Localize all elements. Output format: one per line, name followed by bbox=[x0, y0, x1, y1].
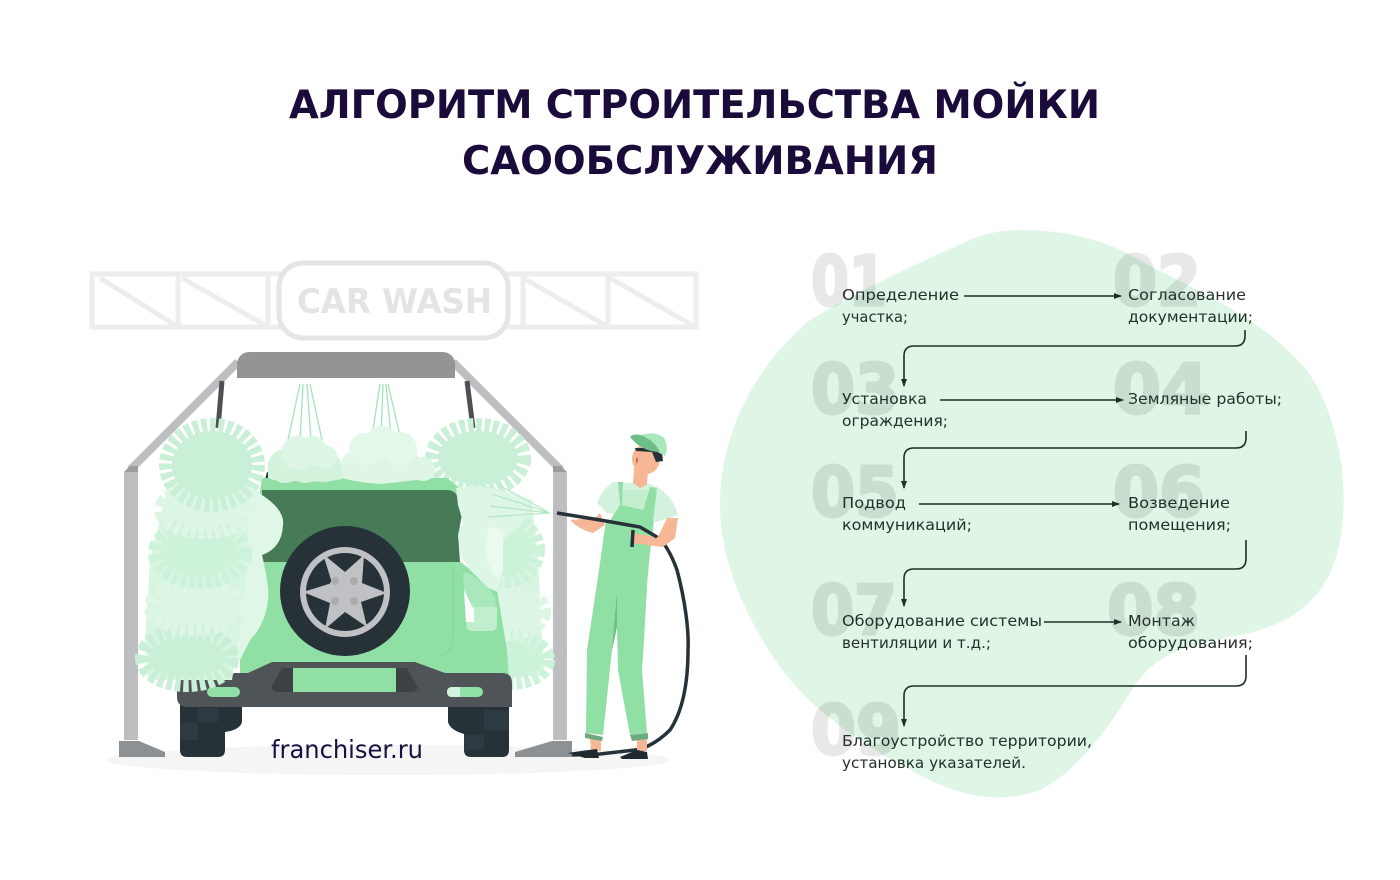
step numbers: 09 bbox=[811, 691, 901, 771]
car wash sign with truss: CAR WASH bbox=[297, 282, 492, 322]
website label: franchiser.ru bbox=[271, 735, 423, 764]
foam on the right side bbox=[456, 486, 530, 592]
car bbox=[177, 472, 512, 757]
step numbers bbox=[811, 242, 1209, 771]
right brushes bbox=[438, 431, 545, 680]
step numbers: 08 bbox=[1107, 571, 1200, 651]
side window bbox=[463, 573, 497, 631]
title: АЛГОРИТМ СТРОИТЕЛЬСТВА МОЙКИ bbox=[289, 81, 1100, 128]
panel: steps background blob bbox=[720, 230, 1344, 797]
rear wheels bbox=[180, 700, 242, 757]
shirt bbox=[597, 482, 678, 522]
step numbers: 06 bbox=[1113, 453, 1205, 533]
worker bbox=[557, 433, 688, 759]
hose bbox=[572, 537, 688, 755]
ground shadow bbox=[107, 745, 669, 775]
step labels bbox=[842, 286, 1282, 772]
step labels: ограждения; bbox=[842, 412, 948, 430]
foam on the left side bbox=[222, 487, 283, 660]
illustration: car wash bbox=[87, 241, 700, 775]
step numbers: 01 bbox=[811, 242, 887, 322]
step labels: Подвод bbox=[842, 494, 906, 512]
step labels: Земляные работы; bbox=[1128, 390, 1282, 408]
spare wheel bbox=[280, 526, 410, 656]
title bbox=[289, 81, 1100, 184]
title: САООБСЛУЖИВАНИЯ bbox=[462, 138, 938, 184]
step labels: помещения; bbox=[1128, 516, 1231, 534]
water jets bbox=[288, 384, 400, 440]
step labels: установка указателей. bbox=[842, 754, 1026, 772]
bib bbox=[599, 482, 657, 575]
car wash sign with truss bbox=[92, 263, 696, 338]
step numbers: 03 bbox=[811, 350, 899, 430]
step numbers: 05 bbox=[811, 453, 899, 533]
step labels: Установка bbox=[842, 390, 927, 408]
ankles bbox=[590, 738, 647, 751]
arms bbox=[570, 513, 678, 547]
step labels: оборудования; bbox=[1128, 634, 1253, 652]
top foam bbox=[268, 426, 435, 484]
flow arrows bbox=[904, 296, 1246, 726]
wash frame bbox=[119, 352, 572, 757]
step numbers: 02 bbox=[1113, 242, 1201, 322]
step numbers: 04 bbox=[1113, 350, 1209, 430]
step labels: Монтаж bbox=[1128, 612, 1195, 630]
step labels: Определение bbox=[842, 286, 959, 304]
licence plate bbox=[293, 668, 396, 692]
step labels: коммуникаций; bbox=[842, 516, 972, 534]
spray from gun bbox=[488, 483, 550, 517]
spray gun bbox=[557, 513, 657, 547]
left brushes bbox=[145, 431, 252, 680]
step labels: участка; bbox=[842, 308, 908, 326]
bumper bbox=[177, 662, 512, 707]
legs bbox=[586, 520, 654, 735]
shoes bbox=[568, 749, 648, 759]
step labels: Оборудование системы bbox=[842, 612, 1042, 630]
step labels: вентиляции и т.д.; bbox=[842, 634, 991, 652]
neck and head bbox=[633, 468, 648, 488]
step labels: Согласование bbox=[1128, 286, 1246, 304]
step labels: Благоустройство территории, bbox=[842, 732, 1092, 750]
step labels: документации; bbox=[1128, 308, 1253, 326]
step labels: Возведение bbox=[1128, 494, 1230, 512]
step numbers: 07 bbox=[811, 571, 897, 651]
cap bbox=[638, 433, 667, 456]
